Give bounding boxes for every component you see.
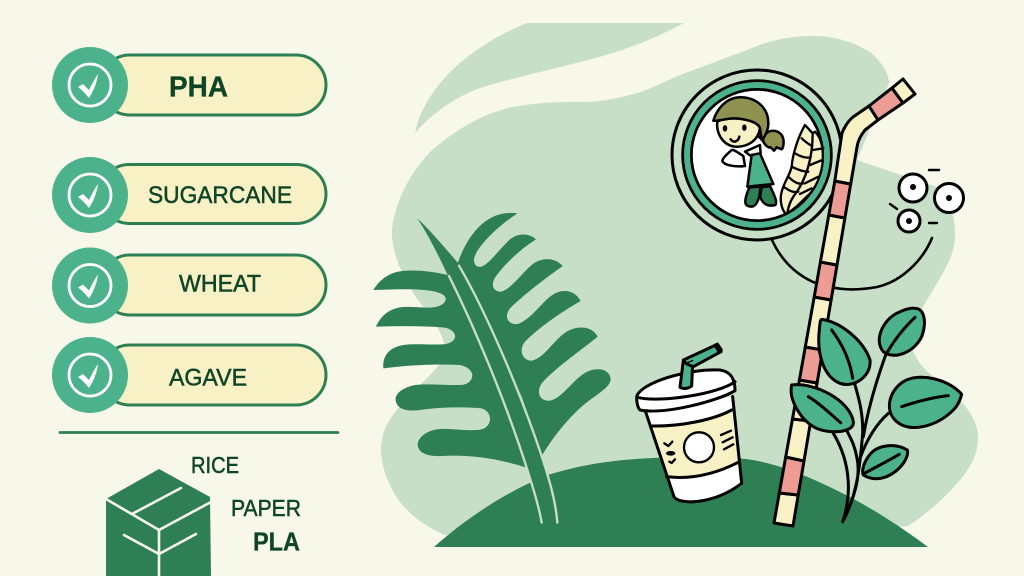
takeaway cup: [637, 344, 742, 502]
cardboard box icon: [106, 469, 211, 576]
pill: SUGARCANE: [52, 157, 326, 233]
background blob: [381, 23, 978, 535]
plant with leaves: [791, 308, 962, 522]
straw character eyes: [890, 170, 964, 232]
pill: PHA: PHA: [169, 72, 228, 104]
pill: WHEAT: WHEAT: [179, 270, 261, 298]
wheat ear: [781, 125, 823, 214]
pill: AGAVE: [52, 337, 326, 413]
pill: WHEAT: [52, 248, 326, 324]
label: PLA: PLA: [253, 526, 300, 556]
label: RICE: RICE: [191, 452, 239, 478]
pill: SUGARCANE: SUGARCANE: [148, 182, 292, 209]
ground hill: [434, 457, 928, 547]
fern leaf: [373, 213, 611, 523]
striped drinking straw: [774, 79, 915, 526]
label: PAPER: PAPER: [231, 495, 301, 521]
magnifier circle with girl and wheat: [672, 70, 842, 240]
magnifier smile line: [772, 238, 932, 289]
pill: PHA: [52, 47, 326, 123]
girl: [713, 97, 784, 207]
pill: AGAVE: AGAVE: [169, 364, 247, 392]
